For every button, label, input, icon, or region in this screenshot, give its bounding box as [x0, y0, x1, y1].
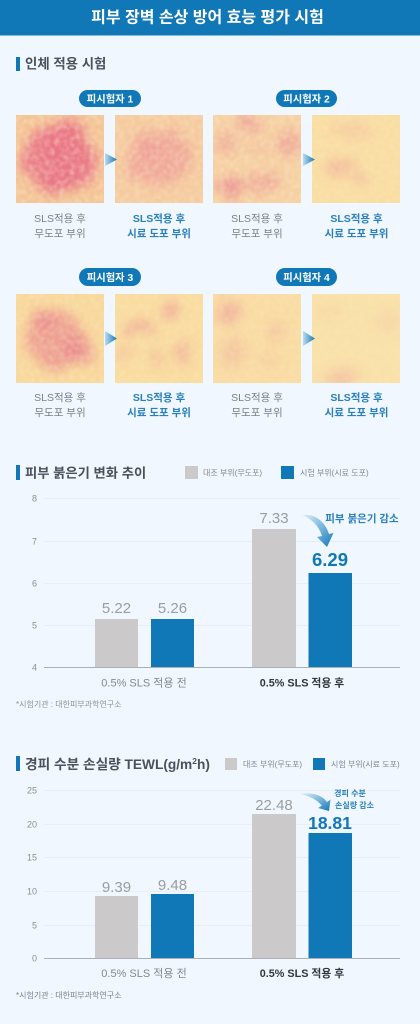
label: subject 2: [276, 90, 337, 107]
label: subject 4: 피시험자 4: [283, 271, 330, 284]
caption: untreated: SLS적용 후: [231, 392, 283, 404]
footnote: redness chart: *시험기관 : 대한피부과학연구소: [16, 699, 121, 709]
panel: subject 3: [16, 268, 203, 419]
label: subject 1: 피시험자 1: [87, 92, 134, 106]
caption: untreated: 무도포 부위: [34, 227, 86, 240]
photo: subject 2 treated: [312, 115, 400, 203]
caption: untreated: SLS적용 후: [231, 213, 283, 225]
title banner: [0, 0, 420, 36]
legend: redness chart: [185, 466, 369, 479]
label: subject 2: 피시험자 2: [283, 92, 330, 106]
bar chart: TEWL: 5: [32, 920, 37, 930]
bar chart: TEWL: 9.39: [102, 879, 131, 896]
label: subject 1: [79, 90, 141, 107]
bar chart: skin redness: [32, 494, 400, 690]
legend: TEWL chart: 시험 부위(시료 도포): [331, 760, 400, 769]
caption: untreated: 무도포 부위: [231, 227, 283, 240]
bar chart: TEWL: 15: [27, 852, 37, 862]
caption: treated: 시료 도포 부위: [127, 227, 191, 240]
callout: TEWL decrease: 손실량 감소: [335, 800, 375, 810]
heading: TEWL: 2: [192, 756, 197, 766]
caption: treated: SLS적용 후: [330, 212, 383, 225]
bar chart: TEWL: 0.5% SLS 적용 전: [101, 967, 187, 980]
bar chart: skin redness: 5.22: [102, 600, 131, 617]
bar chart: TEWL: [27, 786, 400, 980]
bar chart: skin redness: 6: [32, 578, 37, 588]
heading: skin redness trend: 피부 붉은기 변화 추이: [25, 466, 146, 480]
arrow: [303, 153, 315, 166]
caption: treated: 시료 도포 부위: [127, 406, 191, 419]
arrow: [303, 331, 315, 346]
photo: subject 1 untreated: [16, 115, 104, 203]
caption: untreated: SLS적용 후: [34, 392, 86, 404]
bar chart: TEWL: 10: [27, 886, 37, 896]
photo: subject 1 treated: [115, 115, 203, 203]
heading: TEWL: h): [197, 757, 210, 772]
arrow: [105, 153, 117, 166]
heading: human application test: 인체 적용 시험: [25, 56, 106, 72]
bar chart: TEWL: 0: [32, 954, 37, 964]
photo: subject 4 treated: [312, 294, 400, 387]
caption: untreated: SLS적용 후: [34, 213, 86, 225]
bar chart: TEWL: 22.48: [255, 797, 293, 814]
callout: TEWL decrease: [300, 788, 375, 811]
bar chart: TEWL: 20: [27, 820, 37, 830]
photo: subject 3 treated: [115, 294, 203, 383]
panel: subject 2: [213, 90, 400, 240]
bar chart: skin redness: 5.26: [158, 600, 187, 617]
bar chart: TEWL: 9.48: [158, 877, 187, 894]
photo: subject 4 untreated: [213, 294, 301, 383]
callout: redness decrease: [302, 512, 399, 547]
footnote: TEWL chart: *시험기관 : 대한피부과학연구소: [16, 990, 121, 1000]
bar chart: skin redness: 7.33: [259, 510, 289, 527]
panel: subject 4: [213, 268, 400, 419]
bar chart: skin redness: 4: [32, 662, 37, 672]
caption: treated: SLS적용 후: [133, 212, 185, 225]
photo: subject 2 untreated: [213, 115, 301, 203]
bar chart: skin redness: 8: [32, 494, 37, 504]
caption: treated: SLS적용 후: [330, 391, 383, 404]
caption: treated: 시료 도포 부위: [325, 227, 388, 240]
heading: TEWL: 경피 수분 손실량 TEWL(g/m: [25, 757, 192, 772]
legend: redness chart: 대조 부위(무도포): [203, 468, 262, 478]
label: subject 3: 피시험자 3: [87, 271, 134, 284]
photo: subject 3 untreated: [16, 294, 104, 383]
callout: TEWL decrease: 경피 수분: [334, 788, 366, 798]
bar chart: skin redness: 6.29: [312, 549, 348, 570]
bar chart: TEWL: 25: [27, 786, 37, 796]
arrow: [105, 331, 117, 346]
bar chart: skin redness: 5: [32, 620, 37, 630]
bar chart: skin redness: 0.5% SLS 적용 전: [101, 676, 187, 690]
bar chart: skin redness: 7: [32, 536, 37, 546]
title banner: 피부 장벽 손상 방어 효능 평가 시험: [91, 8, 324, 26]
caption: untreated: 무도포 부위: [231, 406, 283, 419]
label: subject 4: [276, 268, 337, 286]
legend: TEWL chart: 대조 부위(무도포): [243, 760, 302, 769]
callout: redness decrease: 피부 붉은기 감소: [325, 512, 399, 525]
bar chart: TEWL: 18.81: [308, 813, 352, 833]
caption: untreated: 무도포 부위: [34, 406, 86, 419]
bar chart: skin redness: 0.5% SLS 적용 후: [260, 676, 344, 690]
caption: treated: 시료 도포 부위: [325, 406, 388, 419]
legend: TEWL chart: [225, 758, 400, 770]
legend: redness chart: 시험 부위(시료 도포): [300, 468, 369, 478]
label: subject 3: [79, 268, 141, 286]
panel: subject 1: [16, 90, 203, 240]
caption: treated: SLS적용 후: [133, 391, 185, 404]
bar chart: TEWL: 0.5% SLS 적용 후: [260, 966, 344, 980]
